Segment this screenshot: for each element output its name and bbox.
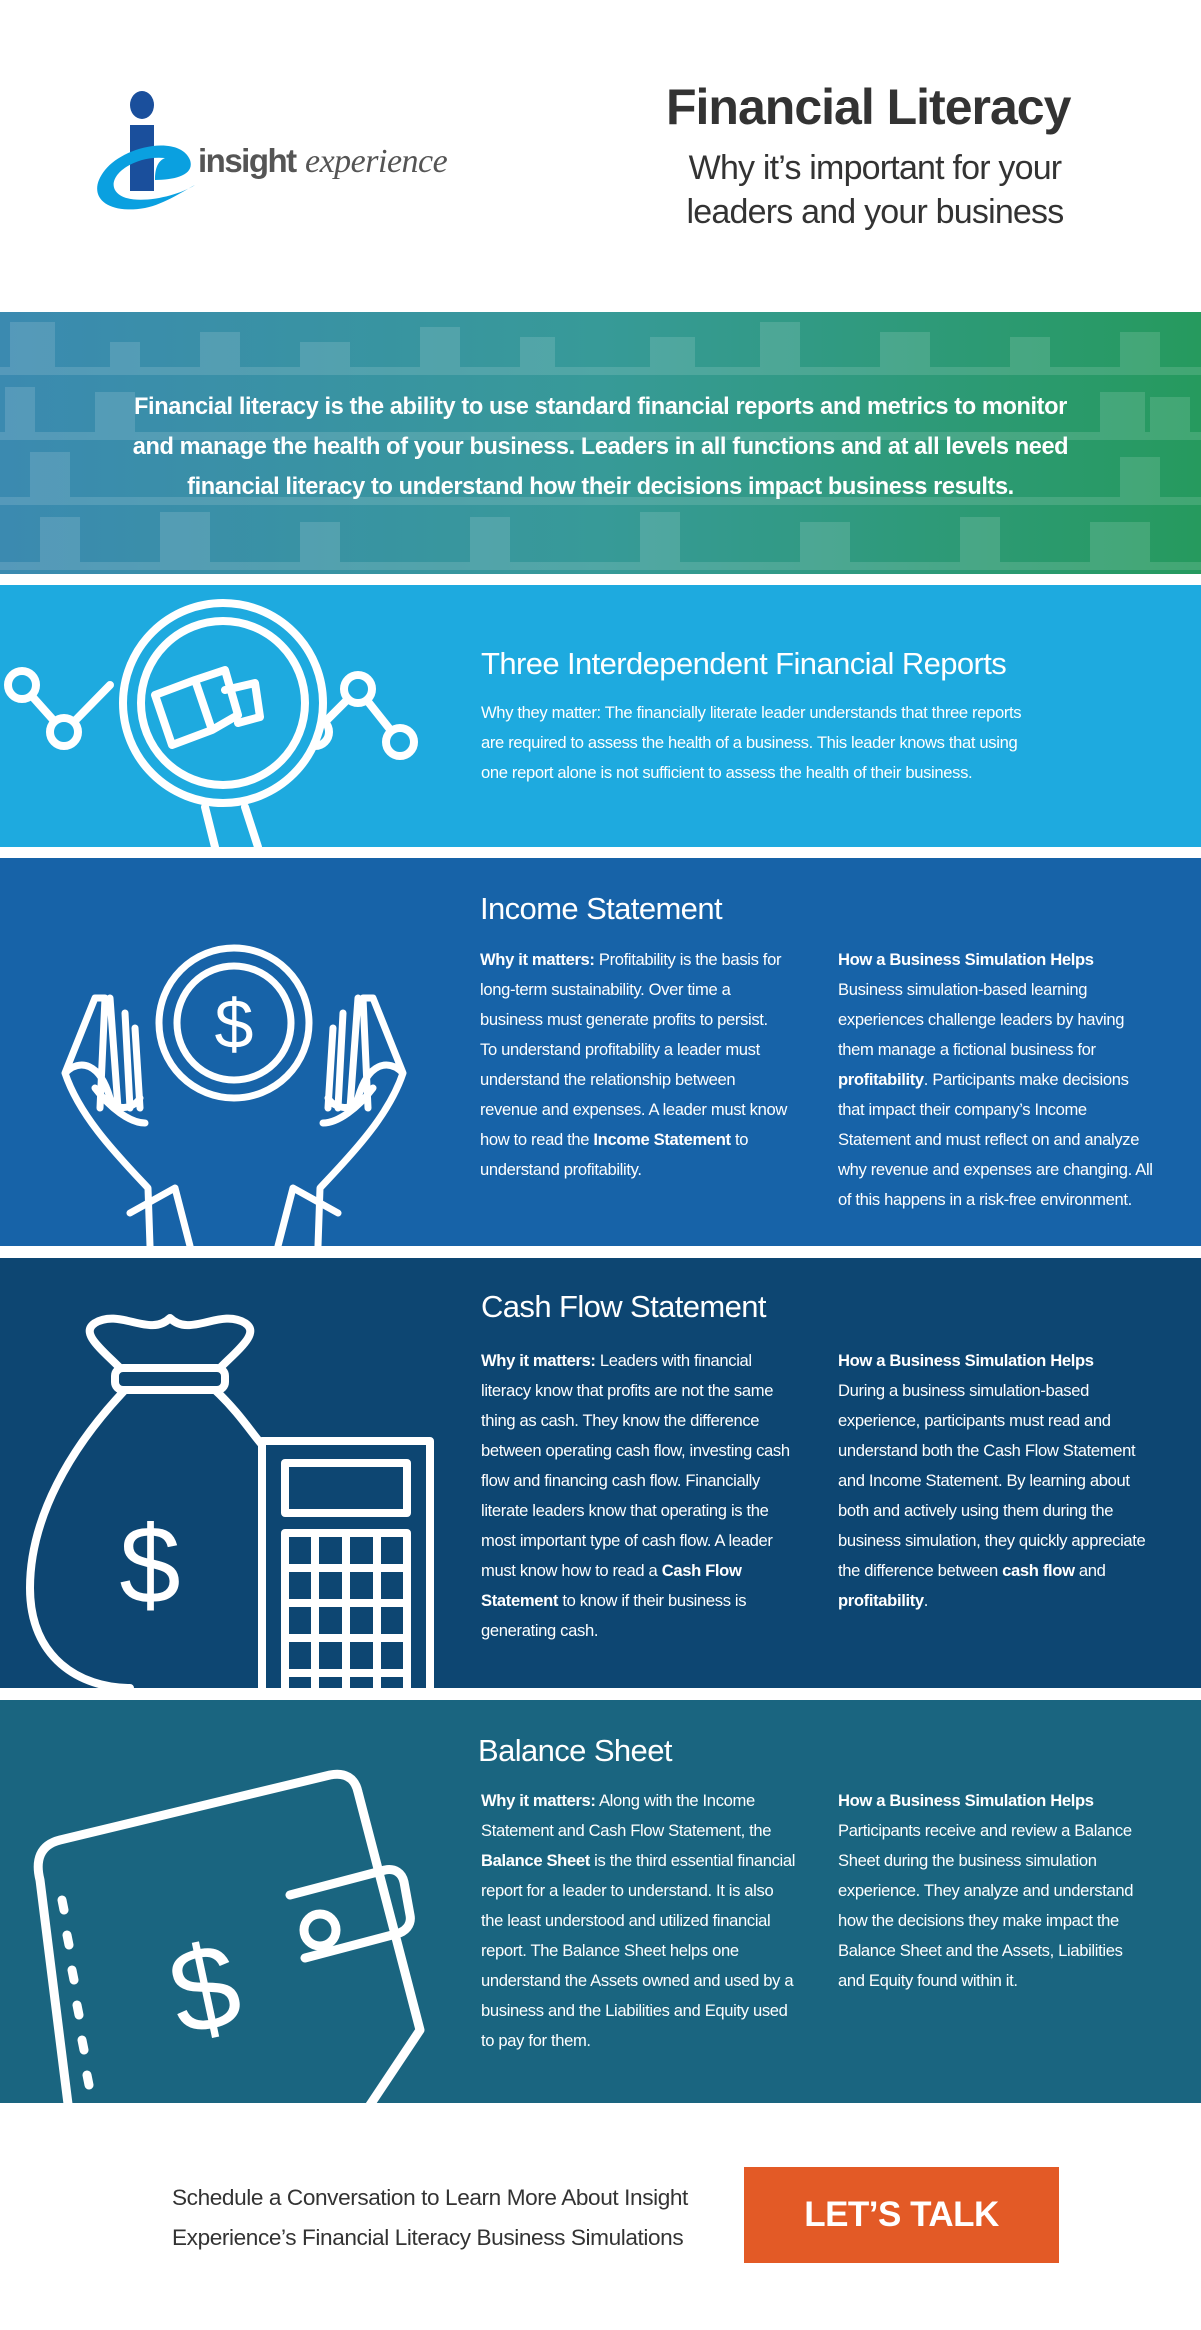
heading: Three Interdependent Financial Reports [481, 646, 1006, 681]
column: how simulation helps: profitability. Participants make decisions [838, 1070, 1129, 1089]
column: how simulation helps: How a Business Simulation Helps [838, 950, 1094, 969]
subtitle: leaders and your business [687, 193, 1063, 231]
column: how simulation helps: experience. They analyze and understand [838, 1881, 1133, 1900]
column: how simulation helps: them manage a fictional business for [838, 1040, 1096, 1059]
column: how simulation helps: profitability. [838, 1591, 928, 1610]
column: why it matters: To understand profitability a leader must [480, 1040, 760, 1059]
column: how simulation helps: of this happens in a risk-free environment. [838, 1190, 1132, 1209]
column: why it matters: must know how to read a Cash Flow [481, 1561, 742, 1580]
column: how simulation helps: the difference between cash flow and [838, 1561, 1106, 1580]
text: Why they matter: The financially literate leader understands that three reports [481, 703, 1021, 722]
button: let's talk [744, 2167, 1059, 2263]
column: why it matters: revenue and expenses. A leader must know [480, 1100, 787, 1119]
column: why it matters: how to read the Income Statement to [480, 1130, 748, 1149]
column: how simulation helps: and Income Statement. By learning about [838, 1471, 1130, 1490]
panel: income statement [0, 858, 1201, 1246]
column: how simulation helps: that impact their company’s Income [838, 1100, 1087, 1119]
panel: three reports [0, 585, 1201, 847]
column: why it matters: literate leaders know that operating is the [481, 1501, 769, 1520]
heading: Income Statement [480, 891, 722, 926]
column: why it matters: between operating cash flow, investing cash [481, 1441, 790, 1460]
column: how simulation helps: How a Business Simulation Helps [838, 1351, 1094, 1370]
column: why it matters: Statement to know if their business is [481, 1591, 746, 1610]
column: how simulation helps: understand both the Cash Flow Statement [838, 1441, 1135, 1460]
text [481, 703, 1021, 782]
column: why it matters: understand the Assets owned and used by a [481, 1971, 793, 1990]
column: why it matters: report. The Balance Sheet helps one [481, 1941, 739, 1960]
column: why it matters: Why it matters: Leaders with financial [481, 1351, 752, 1370]
icon: wallet: $ [158, 1917, 251, 2061]
text: one report alone is not sufficient to assess the health of their business. [481, 763, 972, 782]
icon: money bag and calculator: $ [119, 1504, 181, 1627]
subtitle [687, 149, 1063, 231]
column: why it matters: long-term sustainability. Over time a [480, 980, 730, 999]
column: why it matters: understand profitability. [480, 1160, 642, 1179]
footer call to action text [172, 2185, 688, 2250]
column: why it matters: to pay for them. [481, 2031, 591, 2050]
heading: Balance Sheet [478, 1733, 672, 1768]
title: Financial Literacy [666, 79, 1070, 135]
column: how simulation helps [838, 950, 1153, 1209]
column: how simulation helps: Balance Sheet and the Assets, Liabilities [838, 1941, 1123, 1960]
column: why it matters: most important type of cash flow. A leader [481, 1531, 773, 1550]
column: why it matters: literacy know that profits are not the same [481, 1381, 773, 1400]
column: how simulation helps: both and actively using them during the [838, 1501, 1113, 1520]
column: how simulation helps: why revenue and expenses are changing. All [838, 1160, 1153, 1179]
column: how simulation helps: Sheet during the business simulation [838, 1851, 1097, 1870]
column: why it matters [480, 950, 788, 1179]
icon: hands with coin [62, 944, 406, 1246]
column: how simulation helps: How a Business Simulation Helps [838, 1791, 1094, 1810]
column: why it matters: report for a leader to understand. It is also [481, 1881, 773, 1900]
column: how simulation helps: experience, participants must read and [838, 1411, 1111, 1430]
column: why it matters: Why it matters: Profitability is the basis for [480, 950, 781, 969]
column: how simulation helps: how the decisions they make impact the [838, 1911, 1119, 1930]
column: how simulation helps [838, 1351, 1145, 1610]
footer call to action text: Schedule a Conversation to Learn More About Insight [172, 2185, 688, 2210]
column: why it matters: business must generate profits to persist. [480, 1010, 768, 1029]
column: why it matters: understand the relationship between [480, 1070, 735, 1089]
text: are required to assess the health of a business. This leader knows that using [481, 733, 1017, 752]
definition text: Financial literacy is the ability to use standard financial reports and metrics to monitor [134, 394, 1067, 420]
footer call to action text: Experience’s Financial Literacy Business Simulations [172, 2225, 683, 2250]
column: why it matters: Why it matters: Along with the Income [481, 1791, 755, 1810]
header: logo: experience [305, 143, 448, 180]
column: how simulation helps: Participants receive and review a Balance [838, 1821, 1132, 1840]
logo text: insight [198, 142, 297, 179]
icon: logo mark [97, 91, 195, 209]
icon: magnifier with chart [4, 599, 418, 847]
column: how simulation helps: Business simulation-based learning [838, 980, 1087, 999]
panel: balance sheet [0, 1700, 1201, 2103]
definition text: and manage the health of your business. Leaders in all functions and at all levels need [133, 434, 1068, 460]
column: how simulation helps [838, 1791, 1133, 1990]
icon: hands with coin: $ [215, 985, 253, 1063]
banner: definition [0, 312, 1201, 574]
column: why it matters: business and the Liabilities and Equity used [481, 2001, 788, 2020]
definition text: financial literacy to understand how their decisions impact business results. [187, 474, 1014, 500]
column: why it matters: Statement and Cash Flow Statement, the [481, 1821, 771, 1840]
heading: Cash Flow Statement [481, 1289, 766, 1324]
definition text [133, 394, 1068, 500]
column: why it matters: Balance Sheet is the third essential financial [481, 1851, 795, 1870]
column: how simulation helps: and Equity found within it. [838, 1971, 1018, 1990]
subtitle: Why it’s important for your [689, 149, 1061, 187]
column: how simulation helps: experiences challenge leaders by having [838, 1010, 1124, 1029]
column: how simulation helps: business simulation, they quickly appreciate [838, 1531, 1145, 1550]
button: let's talk: LET’S TALK [804, 2195, 999, 2234]
icon: money bag and calculator [26, 1314, 434, 1688]
column: why it matters: flow and financing cash flow. Financially [481, 1471, 760, 1490]
column: how simulation helps: Statement and must reflect on and analyze [838, 1130, 1139, 1149]
decorative bookshelf [0, 322, 1201, 570]
column: how simulation helps: During a business simulation-based [838, 1381, 1089, 1400]
column: why it matters: generating cash. [481, 1621, 598, 1640]
column: why it matters [481, 1351, 790, 1640]
column: why it matters: thing as cash. They know the difference [481, 1411, 759, 1430]
panel: cash flow statement [0, 1258, 1201, 1688]
icon: wallet [34, 1770, 424, 2103]
column: why it matters: the least understood and utilized financial [481, 1911, 770, 1930]
header: logo [97, 91, 448, 210]
column: why it matters [481, 1791, 795, 2050]
